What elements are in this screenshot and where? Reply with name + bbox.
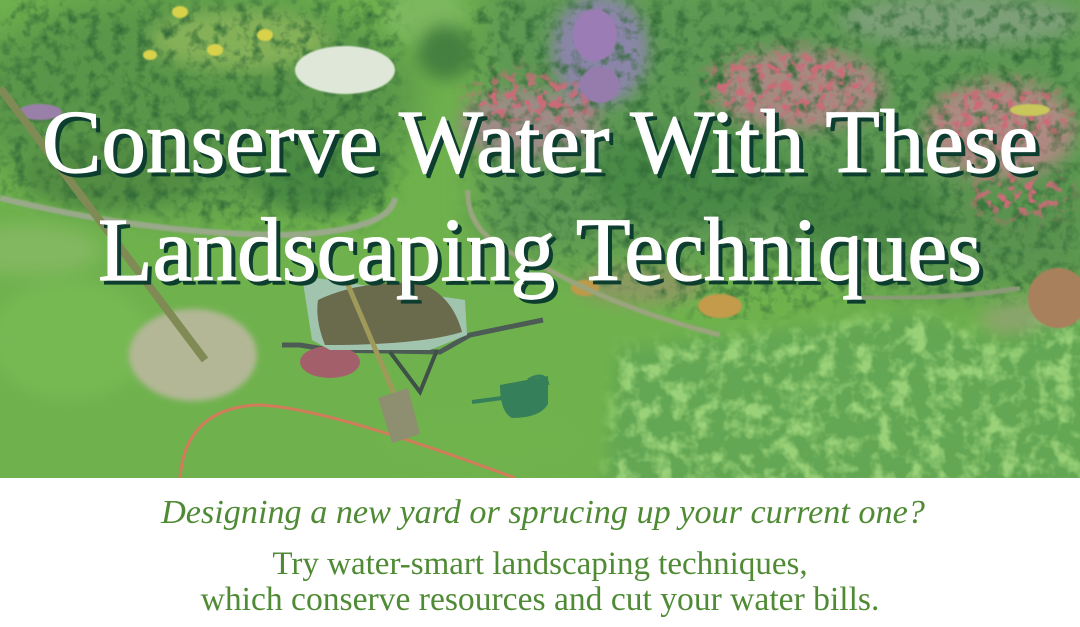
body text: Try water-smart landscaping techniques, xyxy=(272,546,808,582)
subtitle question: Designing a new yard or sprucing up your current one? xyxy=(161,494,925,531)
title text: Conserve Water With These xyxy=(42,93,1038,192)
title xyxy=(42,93,1042,304)
hero: garden photo with title xyxy=(0,0,1080,478)
clay pot xyxy=(1028,268,1080,328)
watering can xyxy=(472,376,548,418)
title shadow: Landscaping Techniques xyxy=(102,205,986,304)
garden hose xyxy=(180,405,515,478)
body text: which conserve resources and cut your water bills. xyxy=(201,581,879,618)
bed edging xyxy=(0,198,395,235)
title text: Landscaping Techniques xyxy=(98,201,982,300)
photo background: lawn xyxy=(0,0,1080,478)
wheelbarrow xyxy=(282,276,543,392)
body text xyxy=(200,546,879,618)
title text xyxy=(42,93,1038,300)
garden beds xyxy=(0,0,1080,478)
title shadow: Conserve Water With These xyxy=(46,97,1042,196)
shrubs lower right xyxy=(600,309,1080,478)
tree trunk xyxy=(0,88,205,360)
title shadow xyxy=(46,97,1042,304)
bare soil circle around tree xyxy=(129,309,257,401)
shovel xyxy=(348,285,420,443)
foliage texture xyxy=(0,0,1080,320)
flower clusters xyxy=(457,39,1079,230)
